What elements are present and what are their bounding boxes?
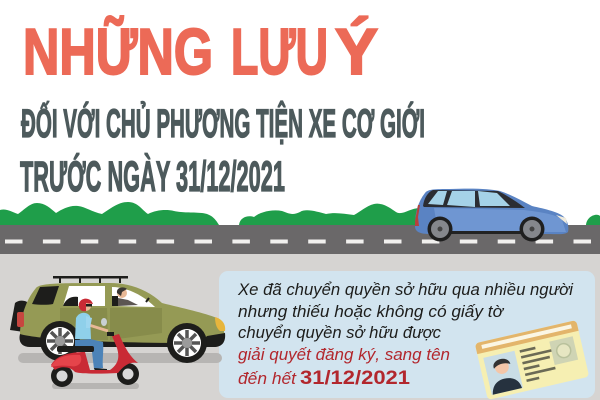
driver bbox=[117, 287, 149, 306]
text block: chuyển quyền sở hữu được bbox=[238, 323, 441, 342]
title: LƯU bbox=[231, 15, 328, 88]
motorbike shadow bbox=[52, 383, 139, 389]
icon: license card bbox=[475, 320, 589, 400]
greenery bbox=[0, 202, 219, 225]
icon: scooter rider bbox=[51, 299, 139, 387]
title: Ý bbox=[335, 15, 378, 88]
rider bbox=[75, 299, 108, 371]
text block bbox=[237, 280, 574, 389]
text block: Xe đã chuyển quyền sở hữu qua nhiều người bbox=[237, 280, 574, 299]
title bbox=[23, 15, 378, 88]
scooter bbox=[51, 318, 139, 387]
panel: info callout bbox=[219, 271, 595, 400]
road bbox=[0, 225, 600, 254]
car shadow bbox=[18, 353, 222, 363]
text block: 31/12/2021 bbox=[300, 368, 410, 389]
icon: blue car bbox=[415, 189, 568, 242]
icon: green car bbox=[10, 276, 225, 363]
greenery bbox=[239, 204, 600, 225]
text block: giải quyết đăng ký, sang tên bbox=[238, 345, 450, 364]
subtitle line 2: TRƯỚC NGÀY 31/12/2021 bbox=[20, 152, 285, 201]
ground bbox=[0, 254, 600, 400]
title: NHỮNG bbox=[23, 15, 213, 88]
text block: nhưng thiếu hoặc không có giấy tờ bbox=[238, 302, 505, 321]
text block: đến hết bbox=[238, 369, 297, 388]
